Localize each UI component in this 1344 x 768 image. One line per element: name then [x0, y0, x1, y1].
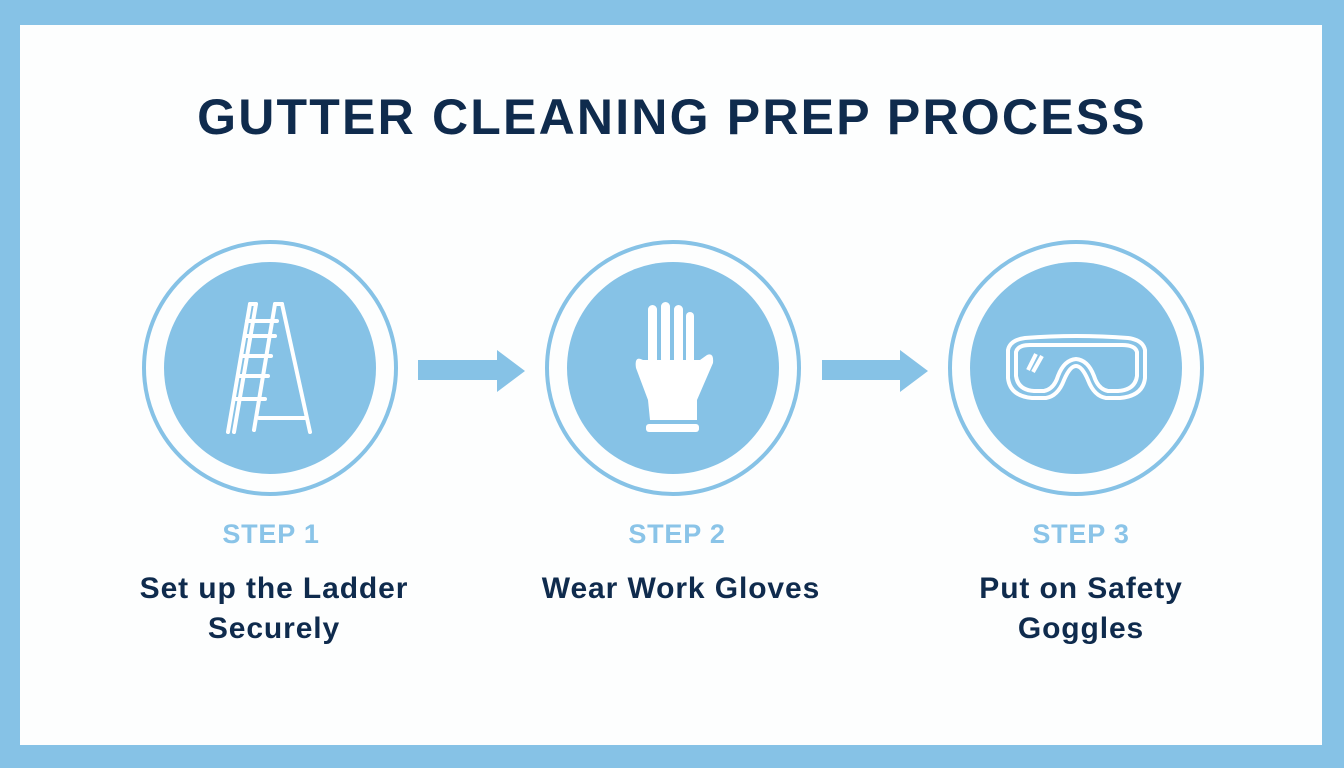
title: GUTTER CLEANING PREP PROCESS [197, 89, 1147, 145]
step 1: ladder [144, 242, 396, 494]
step 1 label: STEP 1 [222, 519, 320, 549]
icon: glove [636, 302, 713, 432]
arrow 1 [418, 350, 525, 392]
step 3 label: STEP 3 [1032, 519, 1130, 549]
step 1 description: Securely [208, 612, 340, 645]
icon: goggles [1008, 336, 1145, 398]
icon: ladder [228, 304, 310, 432]
step 2: gloves [547, 242, 799, 494]
step 1 description: Set up the Ladder [140, 572, 408, 605]
step 2 description: Wear Work Gloves [542, 572, 820, 605]
step 3 description: Put on Safety [979, 572, 1183, 605]
step 3: goggles [950, 242, 1202, 494]
step 3 description: Goggles [1018, 612, 1144, 645]
step 2 label: STEP 2 [628, 519, 726, 549]
arrow 2 [822, 350, 928, 392]
